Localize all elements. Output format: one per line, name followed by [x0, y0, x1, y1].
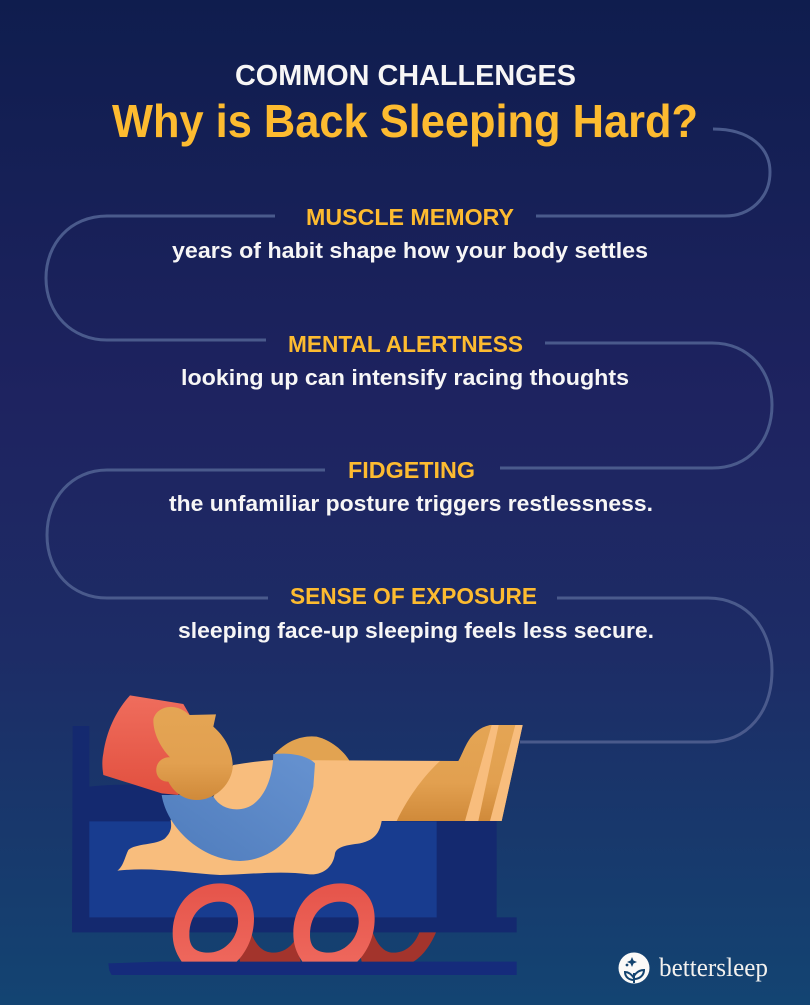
spring coils [173, 883, 375, 962]
description: looking up can intensify racing thoughts [181, 365, 629, 390]
spring connectors [236, 932, 436, 962]
winding connector line [46, 129, 772, 742]
heading: MENTAL ALERTNESS [288, 331, 523, 357]
shirt [162, 754, 315, 861]
challenge: mental alertness [181, 331, 629, 390]
heading: FIDGETING [348, 457, 475, 483]
floor shadow [108, 962, 517, 975]
blanket [117, 760, 502, 875]
title block [112, 60, 698, 147]
mattress [89, 821, 437, 917]
description: the unfamiliar posture triggers restlessness. [169, 491, 653, 516]
main title: Why is Back Sleeping Hard? [112, 95, 698, 147]
eyebrow heading: COMMON CHALLENGES [235, 60, 576, 92]
pillow [102, 695, 191, 795]
foot stripes [465, 725, 523, 821]
wordmark: bettersleep [659, 953, 768, 982]
logo: bettersleep [618, 952, 768, 984]
challenge: sense of exposure [178, 583, 654, 643]
shoulder [273, 736, 350, 762]
foot [397, 725, 523, 821]
head [153, 707, 233, 800]
illustration: person sleeping on back in bed [72, 695, 523, 975]
heading: SENSE OF EXPOSURE [290, 583, 537, 609]
heading: MUSCLE MEMORY [306, 204, 514, 230]
challenge: fidgeting [169, 457, 653, 516]
challenge: muscle memory [172, 204, 648, 263]
icon: moon and sprout [618, 952, 650, 984]
description: sleeping face-up sleeping feels less secure. [178, 618, 654, 643]
description: years of habit shape how your body settles [172, 238, 648, 263]
bed frame [72, 726, 517, 932]
